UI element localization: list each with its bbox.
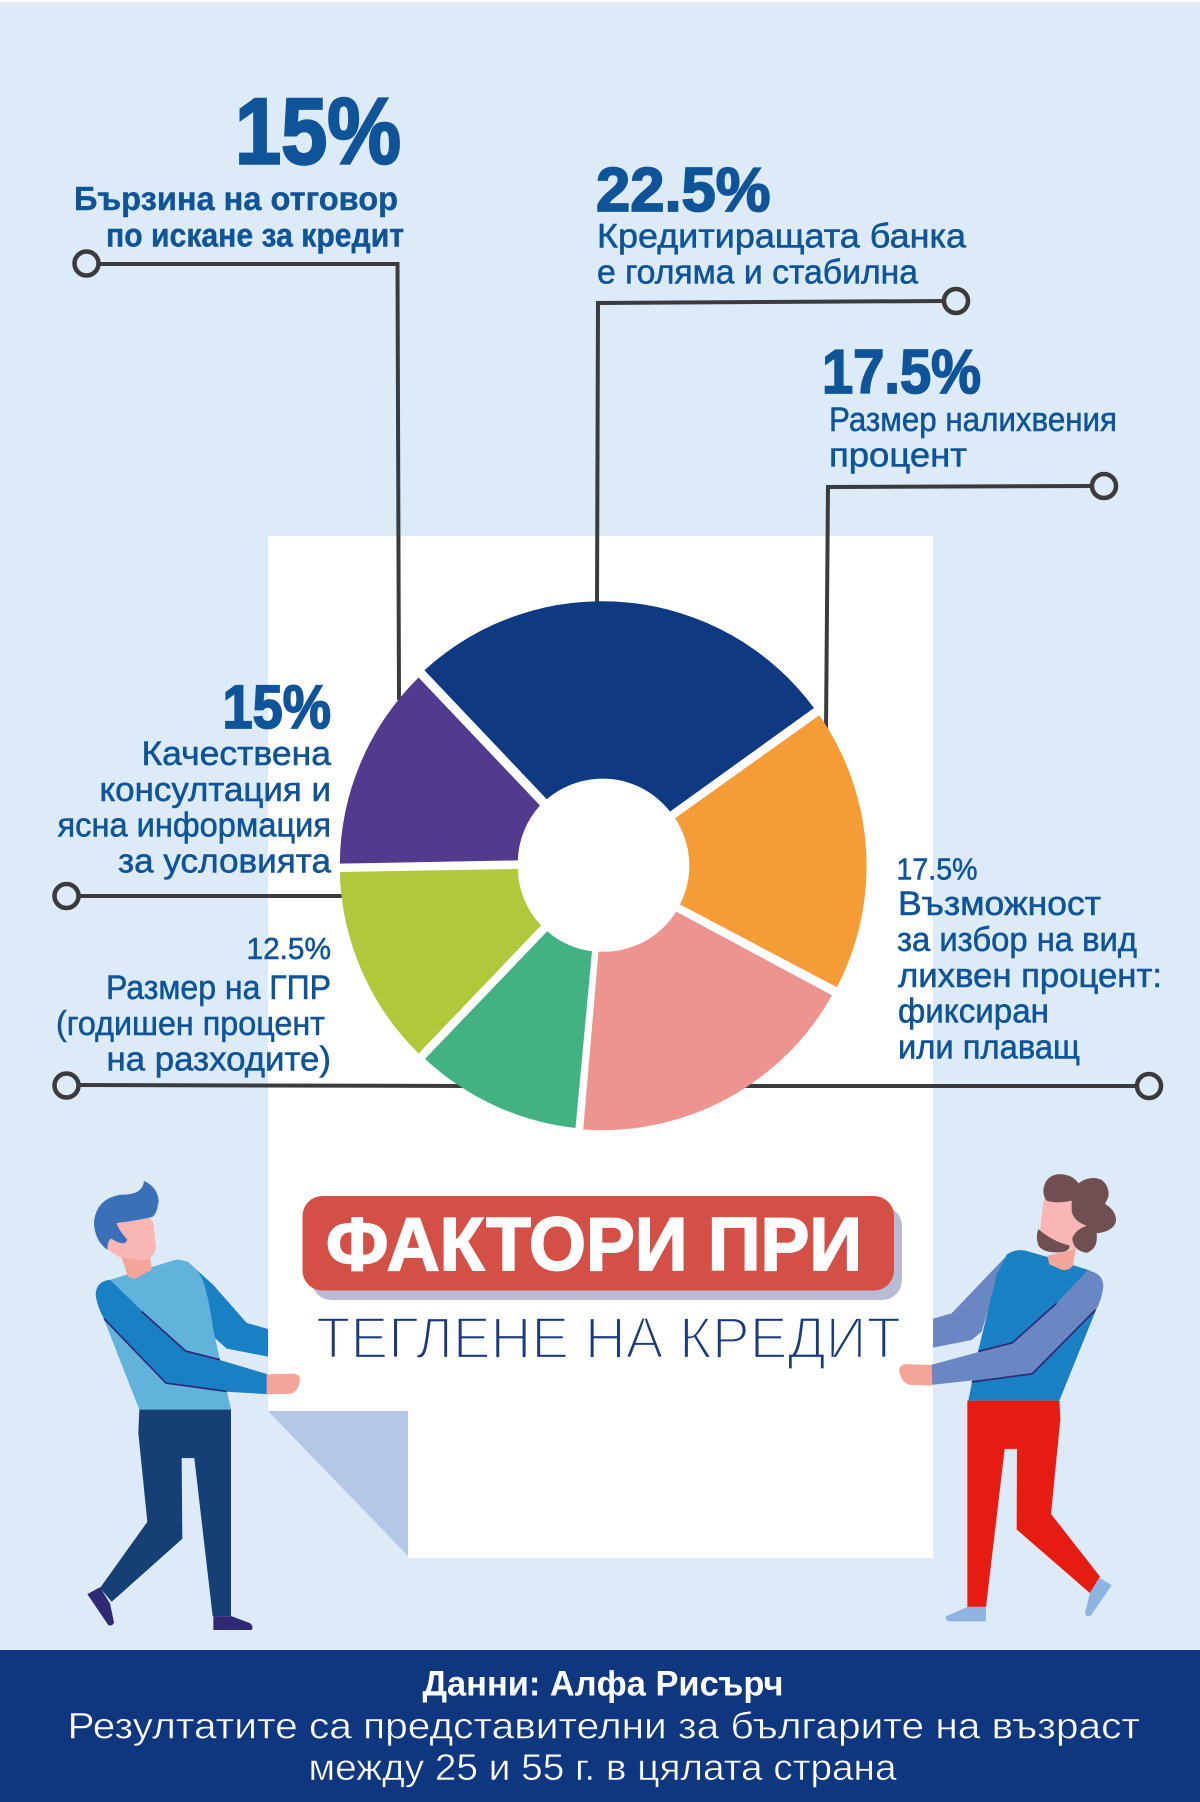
footer note [68, 1706, 1140, 1788]
footer note: Резултатите са представителни за българите на възраст [68, 1706, 1140, 1746]
paper sheet with folded corner [268, 536, 933, 1558]
callout: 12.5% APR size: (годишен процент [56, 1005, 325, 1043]
callout: 17.5% choice of rate type: за избор на вид [897, 921, 1137, 959]
callout: 17.5% interest rate size: Размер налихвения [829, 401, 1117, 439]
callout: 15% quality consultation: 15% [222, 673, 331, 741]
callout: 17.5% choice of rate type: или плаващ [898, 1028, 1080, 1066]
callout: 22.5% large stable bank: е голяма и стабилна [597, 254, 918, 292]
illustration: man with blue hair [87, 1181, 300, 1630]
callout: 15% quality consultation: ясна информация [58, 806, 331, 844]
callout: 22.5% large stable bank [596, 156, 966, 292]
callout: 17.5% choice of rate type [896, 852, 1162, 1066]
segment: green 12.5% [425, 931, 592, 1128]
subtitle: ТЕГЛЕНЕ НА КРЕДИТ [316, 1306, 901, 1371]
connector lines [54, 252, 1161, 1098]
callout: 15% speed of response: по искане за кредит [106, 216, 404, 254]
segment: purple 15% [340, 678, 540, 864]
callout: 15% quality consultation [58, 673, 331, 880]
callout: 12.5% APR size: 12.5% [246, 931, 331, 966]
donut chart [340, 601, 867, 1130]
segment: pink 17.5% [583, 912, 832, 1130]
callout: 17.5% choice of rate type: лихвен процент: [898, 957, 1162, 995]
callout: 17.5% interest rate size [822, 338, 1117, 474]
footer source: Данни: Алфа Рисърч [422, 1664, 784, 1704]
callout: 15% quality consultation: консултация и [100, 771, 331, 809]
callout: 12.5% APR size: на разходите) [106, 1040, 331, 1078]
callout: 15% speed of response [74, 78, 404, 254]
callout: 15% quality consultation: Качествена [142, 735, 331, 773]
title badge: ФАКТОРИ ПРИ [326, 1202, 862, 1286]
segment: navy 22.5% [424, 601, 814, 812]
segment: orange 17.5% [675, 715, 867, 987]
callout: 12.5% APR size: Размер на ГПР [106, 969, 331, 1007]
callout: 22.5% large stable bank: 22.5% [596, 156, 770, 225]
footer note: между 25 и 55 г. в цялата страна [308, 1747, 897, 1788]
callout: 17.5% choice of rate type: фиксиран [898, 992, 1049, 1030]
callout: 22.5% large stable bank: Кредитиращата банка [597, 218, 966, 256]
callout: 15% quality consultation: за условията [118, 842, 331, 880]
callout: 17.5% choice of rate type: Възможност [898, 885, 1101, 923]
callout: 15% speed of response: 15% [235, 78, 401, 184]
callout: 17.5% interest rate size: процент [829, 436, 967, 474]
footer band [0, 1650, 1200, 1802]
callout: 17.5% interest rate size: 17.5% [822, 338, 981, 407]
callout: 12.5% APR size [56, 931, 331, 1078]
callout: 17.5% choice of rate type: 17.5% [896, 852, 978, 886]
segment: lime 15% [340, 869, 541, 1054]
callout: 15% speed of response: Бързина на отговор [74, 180, 398, 217]
illustration: man with curly hair [899, 1174, 1116, 1621]
